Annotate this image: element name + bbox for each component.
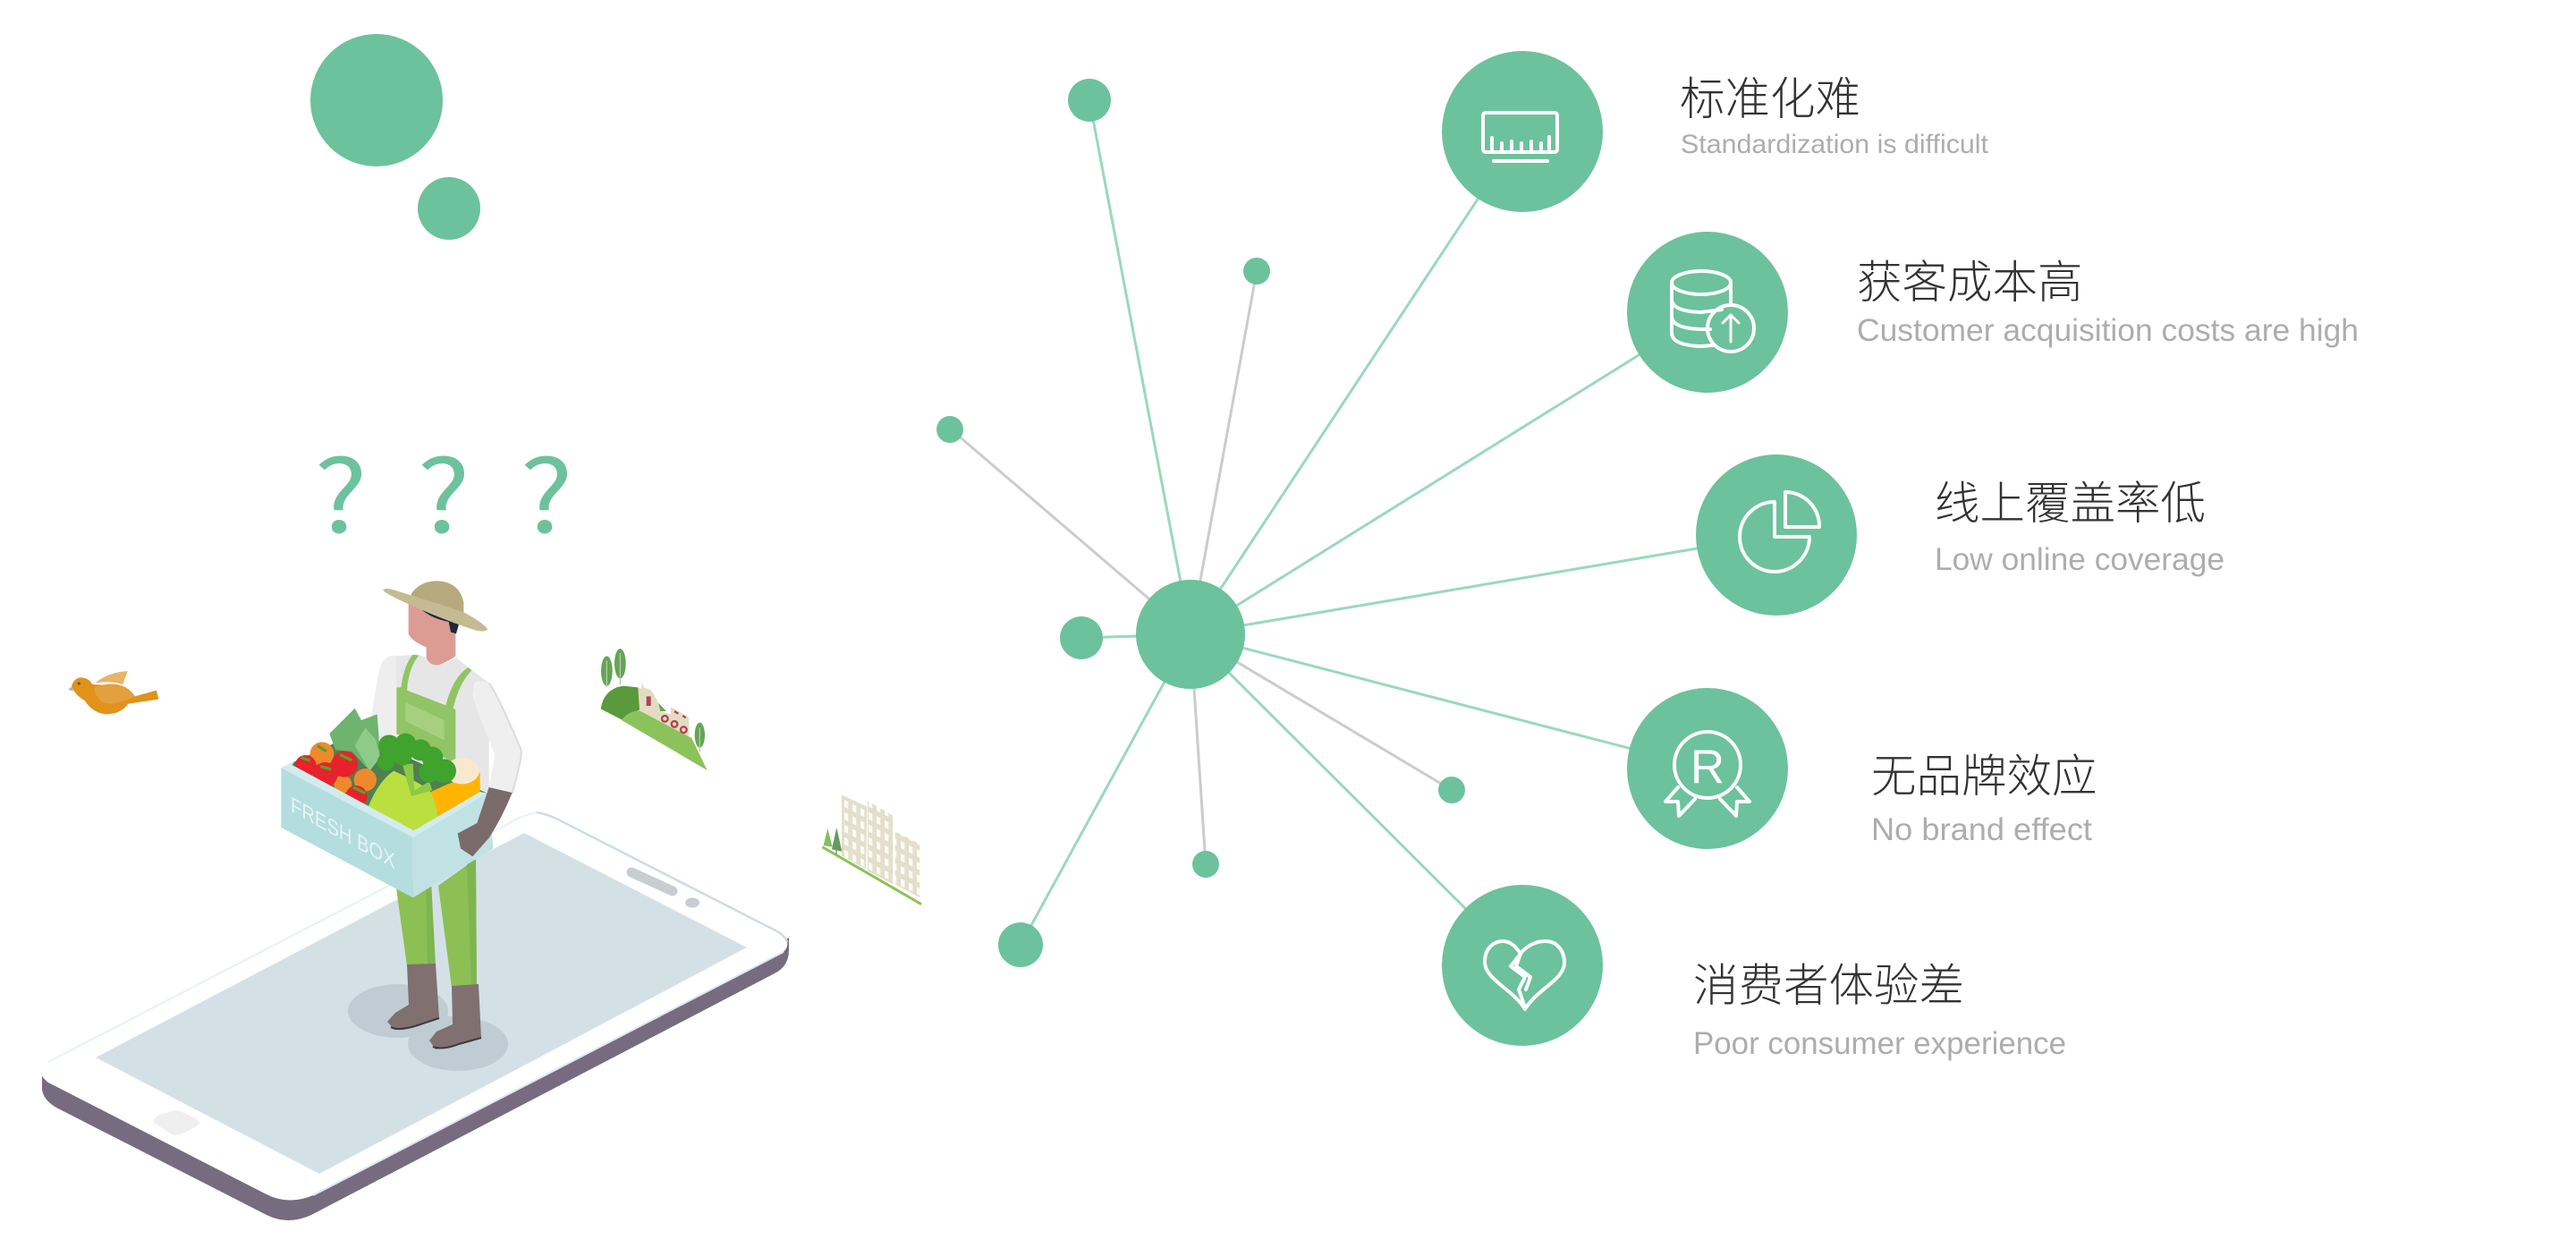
- box right face: [413, 794, 494, 897]
- icon: registered badge: [1665, 732, 1750, 816]
- item: online coverage: [1696, 454, 2224, 616]
- illustration: smartphone: [41, 812, 789, 1220]
- glove: [458, 787, 513, 856]
- apron: [396, 655, 471, 763]
- box interior: [281, 734, 487, 837]
- subtitle: Customer acquisition costs are high: [1857, 313, 2359, 348]
- hub and spokes network: [936, 79, 1776, 967]
- phone home button: [154, 1110, 199, 1135]
- phone speaker: [631, 872, 673, 891]
- phone camera: [685, 898, 699, 907]
- box label: FRESH BOX: [291, 793, 395, 874]
- question marks: ?: [520, 417, 573, 562]
- lettuce: [329, 709, 380, 771]
- illustration: farm scene: [601, 649, 708, 770]
- question marks: ?: [314, 417, 368, 562]
- tomatoes and oranges: [310, 742, 334, 766]
- phone screen: [96, 833, 747, 1174]
- satellite nodes: [936, 79, 1465, 967]
- decorative small bubble: [418, 177, 480, 240]
- question marks: ?: [417, 417, 470, 562]
- shirt: [371, 655, 489, 794]
- heading: 标准化难: [1680, 73, 1860, 124]
- icon: registered badge: R: [1690, 741, 1724, 794]
- icon: database upload: [1672, 271, 1754, 352]
- heading: 线上覆盖率低: [1935, 478, 2206, 529]
- subtitle: Low online coverage: [1935, 542, 2224, 577]
- heading: 获客成本高: [1857, 257, 2082, 308]
- icon: pie chart: [1740, 492, 1819, 572]
- subtitle: Standardization is difficult: [1681, 130, 1989, 159]
- heading: 消费者体验差: [1693, 960, 1964, 1011]
- sleeve: [472, 681, 521, 794]
- cabbage: [369, 771, 437, 832]
- icon: bird: [68, 671, 158, 714]
- hat: [411, 581, 463, 615]
- heading: 无品牌效应: [1871, 751, 2097, 802]
- item: acquisition cost: [1627, 232, 2359, 393]
- spokes: [950, 100, 1776, 965]
- box front face: [281, 768, 413, 897]
- illustration: farmer upper body with produce box: [281, 581, 521, 897]
- item: standardization: [1442, 51, 1989, 212]
- illustration: farmer legs and boots: [387, 859, 481, 1049]
- question marks: [314, 417, 573, 562]
- pumpkin: [428, 772, 480, 819]
- illustration: city buildings: [822, 794, 921, 905]
- item: brand effect: [1627, 688, 2097, 849]
- broccoli: [377, 734, 456, 783]
- hair: [422, 608, 459, 633]
- subtitle: No brand effect: [1871, 812, 2092, 847]
- illustration: foot shadows: [348, 984, 508, 1071]
- item: consumer experience: [1442, 885, 2066, 1061]
- box rim: [281, 760, 487, 837]
- icon: ruler screen: [1483, 113, 1557, 161]
- icon: broken heart: [1485, 941, 1564, 1009]
- head: [409, 604, 455, 665]
- subtitle: Poor consumer experience: [1693, 1026, 2066, 1061]
- hub node: [1136, 580, 1245, 689]
- decorative large bubble: [310, 34, 443, 166]
